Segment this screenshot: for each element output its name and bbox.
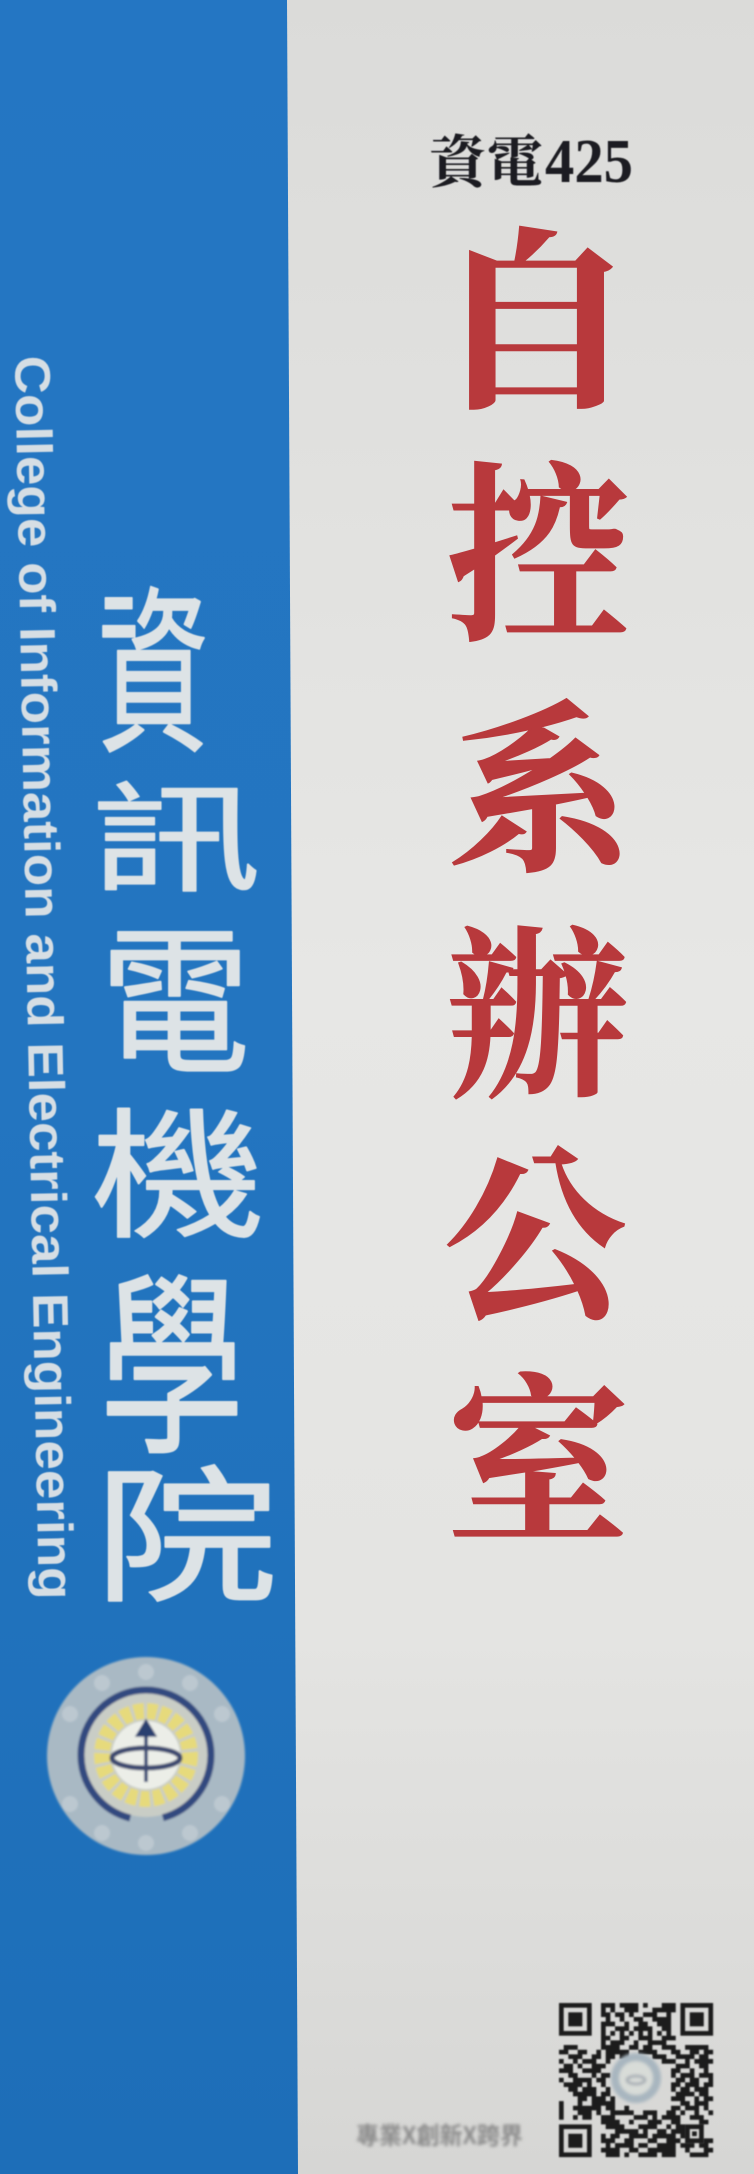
vertical Chinese college name: 學 [100, 1212, 244, 1494]
icon: QR centre seal [611, 2053, 661, 2103]
QR code [559, 2005, 713, 2155]
vertical Chinese college name: 資 [97, 530, 209, 789]
vertical Chinese college name: 機 [91, 1065, 265, 1267]
room number: 資電 [429, 117, 543, 199]
title: 自控系辦公室: 自 [433, 168, 637, 449]
title: 自控系辦公室: 室 [446, 1316, 630, 1581]
icon: college seal [47, 1657, 245, 1855]
panel: blue college band [0, 0, 298, 2174]
vertical Chinese college name: 院 [95, 1419, 277, 1632]
title: 自控系辦公室 [433, 168, 637, 1581]
title: 自控系辦公室: 公 [444, 1092, 630, 1357]
slogan: 專業X創新X跨界 [356, 2116, 523, 2151]
vertical English college name: College of Information and Electrical Engineering [4, 355, 84, 1600]
title: 自控系辦公室: 控 [446, 404, 630, 679]
vertical Chinese college name: 電 [100, 874, 250, 1106]
title: 自控系辦公室: 辦 [446, 870, 630, 1135]
room number [429, 117, 633, 199]
title: 自控系辦公室: 系 [446, 644, 635, 909]
room number: 425 [545, 128, 633, 196]
vertical Chinese college name [91, 530, 277, 1632]
vertical Chinese college name: 訊 [91, 745, 261, 917]
